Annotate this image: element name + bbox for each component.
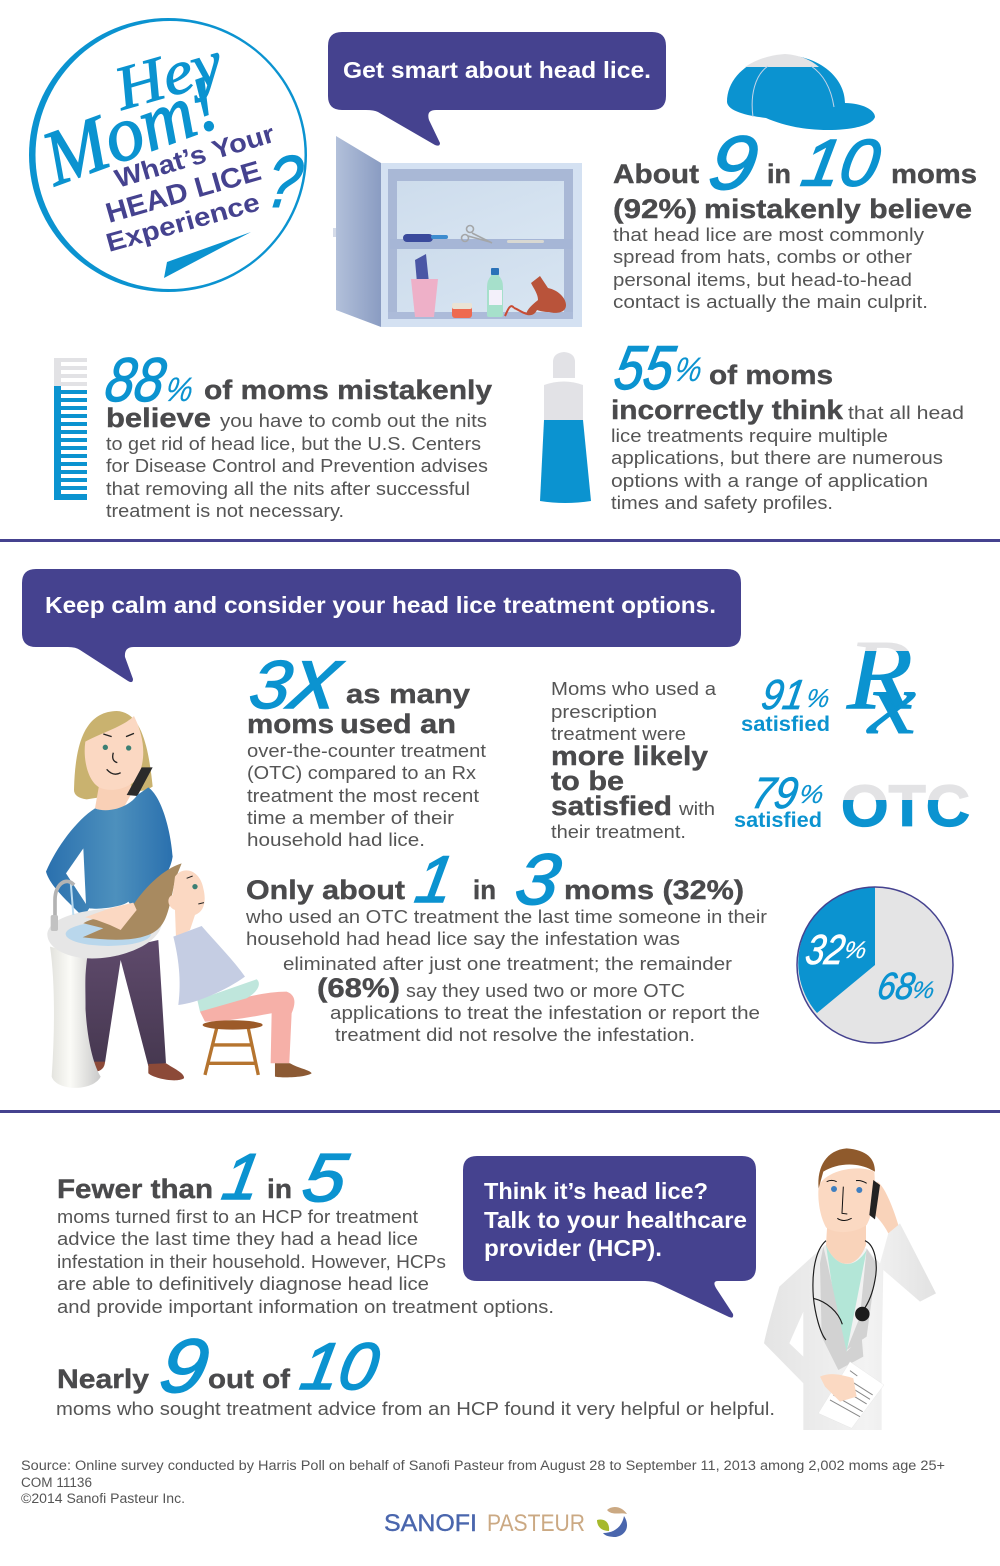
stat: 55% of moms: % [672, 351, 705, 389]
stat: 1 in 3 moms: household had head lice say the infestation was [246, 928, 680, 949]
speech bubble: Keep calm: Keep calm and consider your head lice treatment options. [45, 592, 716, 618]
stat: 91% satisfied Rx: 91 [758, 671, 809, 718]
child head [168, 870, 205, 937]
stat: 9 in 10 moms [613, 122, 977, 312]
doctor hand [820, 1374, 857, 1402]
stat: 88% of moms: for Disease Control and Prevention advises [106, 455, 488, 476]
speech bubble: Keep calm [22, 569, 741, 682]
stat: 9 in 10 moms: 9 [703, 122, 764, 206]
Rx symbol: R [846, 619, 913, 730]
stat: fewer than 1 in 5: moms turned first to an HCP for treatment [57, 1206, 418, 1227]
stat: 55% of moms: times and safety profiles. [611, 492, 833, 513]
stat: 1 in 3 moms: eliminated after just one treatment; the remainder [283, 953, 732, 974]
stat: 91% satisfied Rx: satisfied [741, 713, 830, 736]
stat: 88% of moms: that removing all the nits after successful [106, 478, 470, 499]
comb and pink cup [411, 254, 438, 317]
stat: 79% satisfied OTC [734, 776, 970, 828]
doctor hand and phone [869, 1180, 898, 1233]
source note: ©2014 Sanofi Pasteur Inc. [21, 1491, 185, 1506]
doctor neck [826, 1223, 866, 1264]
title line: Experience: Experience [103, 187, 263, 258]
stat: 1 in 3 moms: 3 [510, 839, 566, 920]
stat: 3x as many moms: x [281, 629, 351, 727]
stat: 9 in 10 moms: moms [891, 159, 977, 189]
jar [452, 303, 472, 318]
stat: 88% of moms: 88 [101, 345, 171, 415]
mom sweater [46, 787, 173, 917]
mom eyes and mouth [103, 733, 134, 774]
stat: 1 in 3 moms: 1 [410, 843, 459, 917]
stat: 9 in 10 moms: that head lice are most commonly [613, 224, 925, 245]
stat: 3x as many moms: treatment the most recent [247, 785, 479, 806]
hair brush [403, 234, 448, 242]
doctor face [818, 1168, 875, 1232]
stat: 3x as many moms: (OTC) compared to an Rx [247, 762, 477, 783]
text: prescription satisfaction [551, 678, 717, 842]
stat: 1 in 3 moms: in [473, 875, 496, 905]
stat: 3x as many moms [244, 629, 486, 850]
stat: 3x as many moms: over-the-counter treatment [247, 740, 486, 761]
speech bubble: Think it's head lice [463, 1156, 756, 1318]
logo: Sanofi Pasteur: PASTEUR [487, 1510, 585, 1537]
logo: Sanofi Pasteur: SANOFI [384, 1510, 477, 1537]
stat: fewer than 1 in 5: 5 [297, 1139, 354, 1216]
speech bubble: Get smart [328, 32, 666, 146]
stat: fewer than 1 in 5: Fewer than [57, 1174, 213, 1204]
swoosh [164, 232, 251, 278]
stat: 9 in 10 moms: (92%) [613, 194, 697, 224]
mom hands [85, 903, 137, 930]
stat: 3x as many moms: as many [346, 679, 470, 709]
gap between arm and torso [66, 848, 86, 904]
stat: nearly 9 out of 10 [56, 1325, 775, 1419]
child shirt [197, 979, 259, 1012]
speech bubble: Get smart: Get smart about head lice. [343, 57, 651, 83]
doctor coat [764, 1223, 936, 1430]
logo: Sanofi Pasteur [384, 1507, 627, 1537]
stat: 9 in 10 moms: mistakenly believe [704, 194, 972, 224]
stat: 9 in 10 moms: spread from hats, combs or other [613, 246, 912, 267]
gap between arm and coat [789, 1312, 803, 1357]
pie chart: 32% / 68%: % [910, 977, 937, 1004]
stat: fewer than 1 in 5: advice the last time they had a head lice [57, 1228, 418, 1249]
stat: 79% satisfied OTC: % [797, 779, 826, 809]
bottle [487, 268, 503, 317]
icon: treatment tube [540, 352, 591, 503]
mom pants [85, 940, 166, 1066]
stat: 3x as many moms: moms [247, 709, 334, 739]
doctor lapels [820, 1247, 877, 1370]
stat: 55% of moms [610, 333, 964, 513]
pie chart: 32% / 68% [797, 887, 953, 1043]
stat: 1 in 3 moms: treatment did not resolve the infestation. [335, 1024, 695, 1045]
OTC letters: OTC [841, 774, 970, 839]
stat: 88% of moms: to get rid of head lice, but the U.S. Centers [106, 433, 481, 454]
mom neck [95, 777, 132, 811]
text: prescription satisfaction: to be [551, 766, 624, 796]
stat: 3x as many moms: household had lice. [247, 829, 425, 850]
title question mark: ? [262, 140, 308, 223]
illustration: doctor on phone [764, 1148, 936, 1430]
stat: 55% of moms: applications, but there are numerous [611, 447, 943, 468]
logo mark [597, 1507, 627, 1537]
stat: fewer than 1 in 5: are able to definitively diagnose head lice [57, 1273, 429, 1294]
title line: What's Your: What’s Your [111, 118, 278, 194]
stat: 79% satisfied OTC: satisfied [734, 809, 822, 832]
text: prescription satisfaction: their treatment. [551, 821, 686, 842]
stat: 3x as many moms: time a member of their [247, 807, 454, 828]
stat: 55% of moms: 55 [610, 333, 680, 403]
stat: 88% of moms: believe [106, 403, 211, 433]
pie chart: 32% / 68%: 32 [802, 926, 849, 973]
source note: COM 11136 [21, 1475, 92, 1490]
stat: 88% of moms: % [163, 371, 196, 409]
pie chart: 32% / 68%: % [842, 937, 869, 964]
mom phone [127, 767, 153, 796]
stat: nearly 9 out of 10: Nearly [57, 1364, 149, 1394]
stat: nearly 9 out of 10: 10 [295, 1330, 384, 1404]
Rx symbol: x [866, 656, 916, 753]
pedestal sink [47, 881, 162, 1088]
stat: 1 in 3 moms: Only about [246, 875, 405, 905]
OTC letters [842, 784, 970, 828]
speech bubble: Think it's head lice: Talk to your healthcare [484, 1207, 747, 1233]
stat: 55% of moms: lice treatments require multiple [611, 425, 888, 446]
stat: fewer than 1 in 5: 1 [218, 1140, 266, 1213]
stethoscope [813, 1241, 876, 1340]
stat: 3x as many moms: used an [340, 709, 456, 739]
stat: 1 in 3 moms: moms (32%) [564, 875, 744, 905]
child cape [173, 926, 245, 1005]
icon: medicine cabinet [333, 136, 582, 327]
title badge: Hey Mom [29, 18, 308, 292]
stat: 55% of moms: options with a range of application [611, 470, 928, 491]
mom shoes [87, 1062, 184, 1080]
stat: 9 in 10 moms: contact is actually the main culprit. [613, 291, 928, 312]
stat: 9 in 10 moms: About [613, 159, 699, 189]
stat: fewer than 1 in 5: and provide important information on treatment options. [57, 1296, 554, 1317]
doctor scrub [826, 1245, 867, 1352]
mom face [85, 716, 143, 790]
stat: 9 in 10 moms: personal items, but head-to-head [613, 269, 912, 290]
text: prescription satisfaction: more likely [551, 741, 708, 771]
stat: 88% of moms: treatment is not necessary. [106, 500, 344, 521]
child hair [83, 863, 182, 940]
stat: 55% of moms: that all head [848, 402, 964, 423]
stat: nearly 9 out of 10: 9 [154, 1325, 215, 1409]
source note [21, 1458, 945, 1506]
stat: 3x as many moms: 3 [244, 646, 298, 723]
Rx symbol: R [846, 619, 913, 730]
stat: fewer than 1 in 5 [57, 1139, 554, 1317]
icon: comb gauge 88% [54, 358, 87, 500]
stat: 91% satisfied Rx: % [804, 683, 832, 713]
stat: 88% of moms [101, 345, 492, 521]
stat: 55% of moms: of moms [709, 360, 833, 390]
text: prescription satisfaction: prescription [551, 701, 657, 722]
stat: 88% of moms: of moms mistakenly [204, 375, 492, 405]
text: prescription satisfaction: treatment were [551, 723, 686, 744]
illustration: mom washing child's hair at sink [46, 711, 312, 1088]
text: prescription satisfaction: with [678, 798, 715, 819]
stat: 79% satisfied OTC: 79 [748, 769, 802, 818]
child shoe [275, 1063, 312, 1077]
text: prescription satisfaction: Moms who used a [551, 678, 717, 699]
speech bubble: Think it's head lice: Think it’s head lice? [484, 1178, 708, 1204]
stat: 1 in 3 moms: applications to treat the infestation or report the [330, 1002, 760, 1023]
stat: 1 in 3 moms [245, 839, 767, 1045]
title line: HEAD LICE: HEAD LICE [102, 155, 264, 229]
text: prescription satisfaction: satisfied [551, 791, 672, 821]
stat: 9 in 10 moms: 10 [796, 127, 885, 200]
stat: fewer than 1 in 5: in [267, 1174, 292, 1204]
stool [203, 1020, 263, 1075]
OTC letters: OTC [841, 774, 970, 839]
stat: 1 in 3 moms: (68%) [317, 973, 400, 1003]
stat: 1 in 3 moms: who used an OTC treatment the last time someone in their [245, 906, 767, 927]
stat: 55% of moms: incorrectly think [611, 395, 844, 425]
stat: fewer than 1 in 5: infestation in their household. However, HCPs [57, 1251, 446, 1272]
child eye [187, 876, 204, 904]
stat: 9 in 10 moms: in [767, 159, 791, 189]
stat: 88% of moms: you have to comb out the nits [220, 410, 487, 431]
hair dryer [505, 276, 566, 316]
title script: Hey: Hey [106, 28, 230, 124]
scissors [462, 226, 492, 243]
icon: blue cap [727, 54, 875, 130]
stat: nearly 9 out of 10: moms who sought treatment advice from an HCP found it very helpful or helpful. [56, 1398, 775, 1419]
speech bubble: Think it's head lice: provider (HCP). [484, 1235, 662, 1261]
stat: nearly 9 out of 10: out of [208, 1364, 291, 1394]
title script: Mom!: Mom! [30, 59, 230, 202]
nail file [507, 240, 544, 243]
Rx symbol [846, 642, 916, 734]
child pink legs [200, 992, 294, 1063]
mom hair [74, 711, 153, 799]
clipboard paper [818, 1362, 884, 1428]
doctor hair [818, 1148, 875, 1188]
stat: 91% satisfied Rx [742, 642, 916, 734]
stat: 1 in 3 moms: say they used two or more OTC [406, 980, 685, 1001]
pie chart: 32% / 68%: 68 [874, 965, 919, 1008]
source note: Source: Online survey conducted by Harris Poll on behalf of Sanofi Pasteur from August 28 to September 11, 2013 among 2,002 moms age 25+ [21, 1458, 945, 1473]
doctor face features [827, 1180, 867, 1220]
